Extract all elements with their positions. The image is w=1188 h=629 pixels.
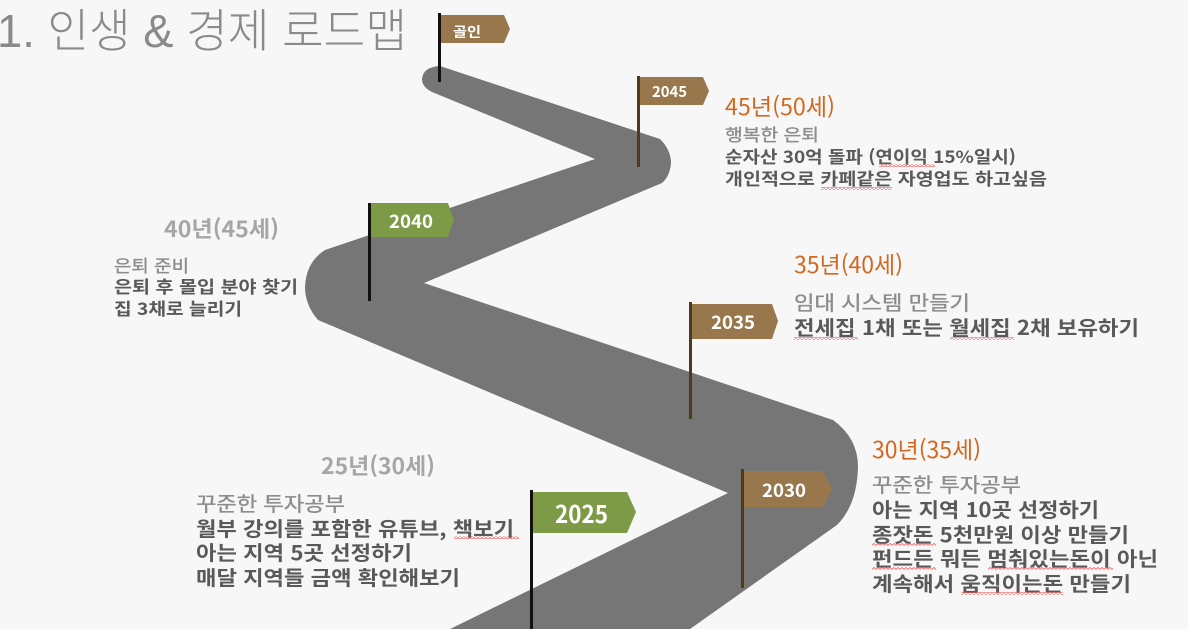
text block: 25 years: 꾸준한 투자공부 bbox=[196, 488, 345, 517]
flag: 2025: 2025 bbox=[555, 495, 608, 530]
text block: 45 years: 행복한 은퇴 bbox=[725, 121, 819, 146]
flag: 2035 bbox=[689, 302, 778, 419]
text block: 25 years: 25년(30세) bbox=[321, 449, 435, 481]
flag: 2045 bbox=[637, 76, 709, 167]
text block: 25 years: 월부 강의를 포함한 유튜브, 책보기 bbox=[196, 513, 514, 542]
text block: 45 years: 45년(50세) bbox=[725, 88, 835, 122]
text block: 25 years: 매달 지역들 금액 확인해보기 bbox=[196, 562, 460, 591]
text block: 30 years: 아는 지역 10곳 선정하기 bbox=[872, 494, 1099, 523]
text block: 30 years: 펀드든 뭐든 멈춰있는돈이 아닌 bbox=[872, 543, 1158, 572]
text block: 45 years bbox=[725, 88, 1047, 190]
flag: 2030: 2030 bbox=[762, 477, 806, 503]
text block: 30 years: 계속해서 움직이는돈 만들기 bbox=[872, 568, 1131, 597]
text block: 40 years bbox=[114, 212, 298, 320]
text block: 30 years bbox=[872, 431, 1158, 597]
text block: 40 years: 은퇴 후 몰입 분야 찾기 bbox=[114, 273, 298, 298]
flag: goal-in: 골인 bbox=[453, 22, 481, 42]
title: 1. 인생 & 경제 로드맵 bbox=[0, 5, 407, 57]
text block: 45 years: 개인적으로 카페같은 자영업도 하고싶음 bbox=[725, 165, 1047, 190]
text block: 35 years: 35년(40세) bbox=[794, 246, 903, 280]
text block: 25 years bbox=[196, 449, 519, 591]
text block: 35 years: 임대 시스템 만들기 bbox=[794, 287, 970, 316]
flag: 2045: 2045 bbox=[652, 81, 687, 102]
text block: 40 years: 집 3채로 늘리기 bbox=[114, 295, 242, 320]
text block: 30 years: 종잣돈 5천만원 이상 만들기 bbox=[872, 519, 1129, 548]
text block: 35 years bbox=[794, 246, 1139, 341]
flag: 2040: 2040 bbox=[389, 208, 433, 234]
text block: 40 years: 은퇴 준비 bbox=[114, 252, 189, 277]
text block: 35 years: 전세집 1채 또는 월세집 2채 보유하기 bbox=[794, 312, 1139, 341]
flag: 2035: 2035 bbox=[711, 309, 755, 335]
text block: 45 years: 순자산 30억 돌파 (연이익 15%일시) bbox=[725, 143, 1016, 168]
flag: 2030 bbox=[741, 469, 832, 588]
winding road bbox=[305, 66, 858, 629]
text block: 30 years: 꾸준한 투자공부 bbox=[872, 469, 1021, 498]
text block: 25 years: 아는 지역 5곳 선정하기 bbox=[196, 537, 412, 566]
flag: 2025 bbox=[530, 490, 636, 629]
text block: 40 years: 40년(45세) bbox=[164, 212, 279, 244]
flag: 2040 bbox=[368, 203, 454, 301]
flag: goal-in bbox=[438, 13, 510, 82]
text block: 30 years: 30년(35세) bbox=[872, 431, 981, 465]
